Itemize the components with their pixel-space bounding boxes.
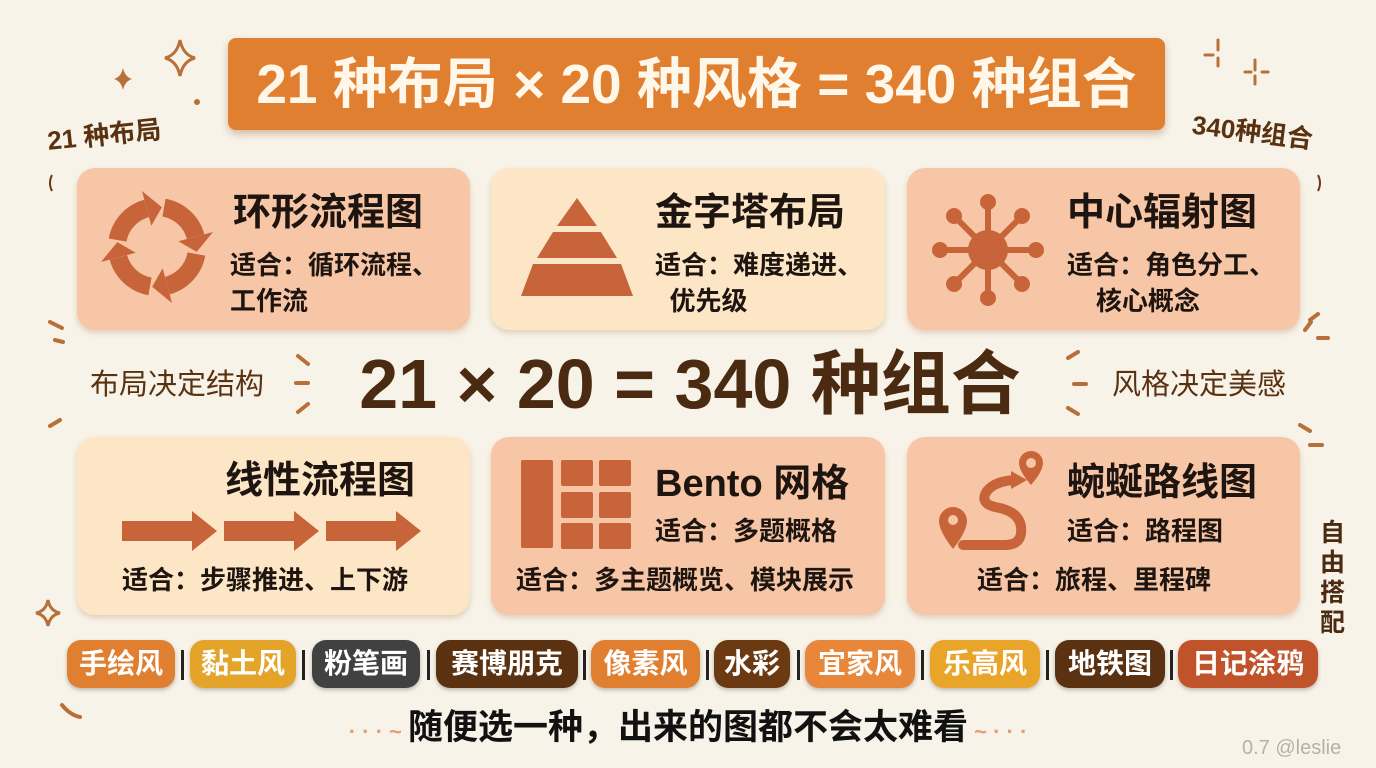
chip: 乐高风 <box>930 640 1040 688</box>
card: Bento 网格 <box>491 437 885 615</box>
center equation: 21 × 20 = 340 种组合 <box>359 345 1021 423</box>
side label: 340种组合: 340种组合 <box>1190 110 1315 154</box>
label: 风格决定美感: 风格决定美感 <box>1112 369 1286 401</box>
chip: 宜家风: 宜家风 <box>818 648 902 679</box>
text: 适合：循环流程、 <box>230 250 438 280</box>
text: 适合：旅程、里程碑 <box>977 565 1211 595</box>
text <box>230 250 438 316</box>
chip: 日记涂鸦 <box>1178 640 1318 688</box>
chip: 手绘风 <box>67 640 175 688</box>
title banner <box>228 38 1165 130</box>
chip: 乐高风: 乐高风 <box>943 648 1027 679</box>
chip: 水彩 <box>714 640 790 688</box>
chip: 像素风: 像素风 <box>603 648 688 679</box>
chip: 黏土风 <box>190 640 296 688</box>
heading: 金字塔布局 <box>655 192 845 234</box>
bottom tagline: · · · ~ 随便选一种，出来的图都不会太难看 ~ · · · <box>349 708 1027 747</box>
chip: 宜家风 <box>805 640 915 688</box>
icon: arrows <box>122 511 421 551</box>
text: 适合：多题概格 <box>655 516 837 546</box>
label: 布局决定结构: 布局决定结构 <box>90 369 264 401</box>
text <box>1067 250 1275 316</box>
card: 金字塔布局 <box>491 168 885 330</box>
card: 中心辐射图 <box>907 168 1300 330</box>
text: 适合：步骤推进、上下游 <box>122 565 408 595</box>
text: 核心概念 <box>1096 286 1200 316</box>
vertical label: 自由搭配: 自由搭配 <box>1320 519 1345 637</box>
heading: 中心辐射图 <box>1067 192 1257 234</box>
watermark: 0.7 @leslie <box>1242 737 1341 759</box>
chip: 赛博朋克 <box>436 640 578 688</box>
text: 优先级 <box>669 286 747 316</box>
heading: 线性流程图 <box>225 460 415 502</box>
card: 环形流程图 <box>77 168 470 330</box>
icon: hub <box>932 194 1044 306</box>
icon: pyramid <box>521 198 633 296</box>
chip: 地铁图 <box>1055 640 1165 688</box>
chip: 粉笔画: 粉笔画 <box>324 648 408 679</box>
chip: 赛博朋克: 赛博朋克 <box>451 648 563 679</box>
chip: 黏土风: 黏土风 <box>201 648 285 679</box>
text <box>655 250 863 316</box>
chip: 地铁图: 地铁图 <box>1068 648 1152 679</box>
side label: 21 种布局: 21 种布局 <box>46 114 163 156</box>
card: 蜿蜒路线图 <box>907 437 1300 615</box>
text: 工作流 <box>230 286 308 316</box>
heading: Bento 网格 <box>655 463 849 505</box>
chip: 手绘风: 手绘风 <box>79 648 163 679</box>
heading: 环形流程图 <box>233 192 423 234</box>
text: 适合：路程图 <box>1067 516 1223 546</box>
heading: 蜿蜒路线图 <box>1067 462 1257 504</box>
icon: bento grid <box>521 460 631 549</box>
text: 适合：多主题概览、模块展示 <box>516 565 854 595</box>
text: 适合：角色分工、 <box>1067 250 1275 280</box>
card: 线性流程图 <box>77 437 470 615</box>
chip: 日记涂鸦: 日记涂鸦 <box>1192 648 1304 679</box>
chip: 像素风 <box>591 640 700 688</box>
icon: route <box>939 451 1043 550</box>
chip: 水彩: 水彩 <box>724 648 780 679</box>
chip: 粉笔画 <box>312 640 420 688</box>
icon: cycle arrows <box>101 191 213 303</box>
title banner: 21 种布局 × 20 种风格 = 340 种组合 <box>256 53 1137 115</box>
text: 适合：难度递进、 <box>655 250 863 280</box>
